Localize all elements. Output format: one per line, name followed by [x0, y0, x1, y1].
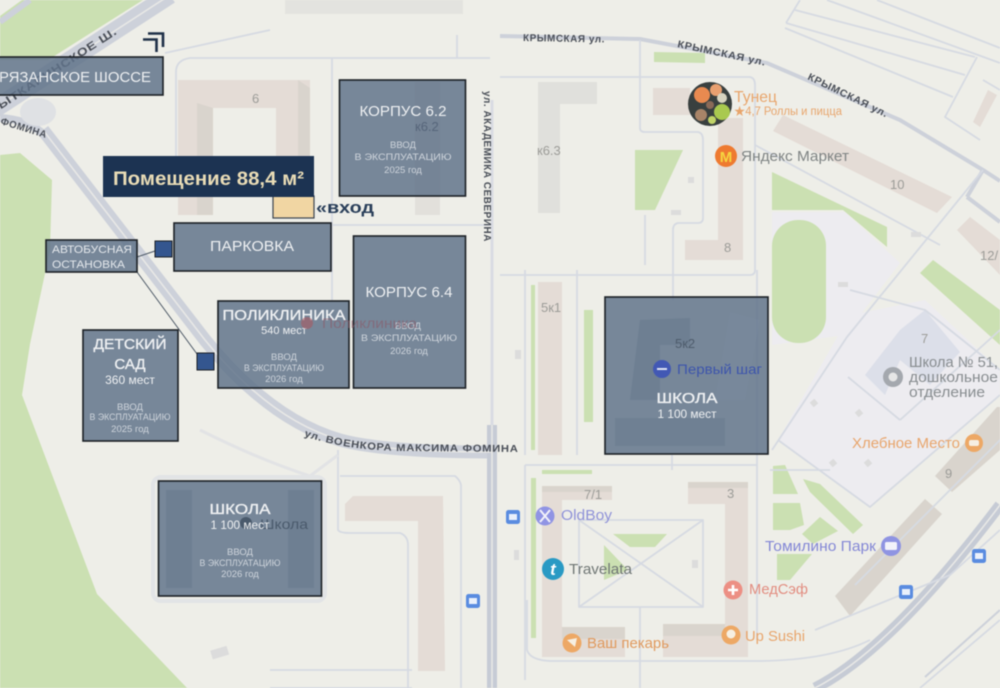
label: Yandex Market: Яндекс Маркет	[741, 148, 849, 165]
icon: Tomilino Park	[881, 536, 901, 556]
label: OldBoy: OldBoy	[561, 507, 613, 524]
label: school 51	[909, 354, 998, 401]
label: Tunets: ★4,7 Роллы и пицца	[734, 105, 843, 118]
panel: Ryazanskoe highway	[0, 57, 163, 95]
panel: Ryazanskoe highway: РЯЗАНСКОЕ ШОССЕ	[0, 69, 151, 86]
panel: school east: 1 100 мест	[658, 407, 717, 421]
label: school 51: отделение	[909, 384, 985, 401]
street label: Krymskaya 2: КРЫМСКАЯ ул.	[676, 39, 767, 69]
map label under panels: clinic: Поликлиника	[322, 315, 417, 331]
house numbers: 7/1	[584, 487, 602, 502]
street label: Voenkora Maksima Fomina: ул. ВОЕНКОРА МАКСИМА ФОМИНА	[303, 430, 518, 453]
panel: school east: 5к2	[675, 336, 695, 351]
icon: north arrow	[143, 34, 163, 52]
school grounds	[772, 212, 1000, 507]
label: Tunets	[734, 89, 843, 118]
icon: Khlebnoe Mesto	[965, 434, 983, 452]
panel: premises area: Помещение 88,4 м²	[113, 169, 304, 190]
panel: clinic: 2026 год	[265, 374, 303, 385]
panel: clinic	[218, 301, 349, 388]
parking marks	[210, 177, 921, 659]
icon: Yandex Market: М	[720, 149, 732, 166]
house numbers: 5к1	[541, 300, 561, 315]
label: Vash pekar: Ваш пекарь	[587, 635, 669, 652]
house numbers: 3	[727, 486, 734, 501]
green area: left park	[0, 153, 187, 688]
panel: school south-west: 2026 год	[221, 569, 259, 580]
house numbers: 6	[252, 91, 259, 106]
panel: school south-west: В ЭКСПЛУАТАЦИЮ	[200, 558, 281, 569]
house numbers: 10	[890, 177, 904, 192]
icon: OldBoy	[536, 506, 554, 526]
panel: building 6.4: ВВОД	[395, 321, 422, 332]
panel: kindergarten: В ЭКСПЛУАТАЦИЮ	[90, 412, 171, 423]
panel: kindergarten: ВВОД	[117, 402, 144, 413]
panel: clinic: ВВОД	[271, 352, 298, 363]
street label: Krymskaya 3: КРЫМСКАЯ ул.	[806, 72, 890, 120]
panel: building 6.4: КОРПУС 6.4	[366, 284, 452, 301]
label: school 51: дошкольное	[909, 369, 998, 386]
label: Tomilino Park: Томилино Парк	[765, 538, 876, 555]
label: Up Sushi: Up Sushi	[745, 628, 805, 645]
street label: Akademika Severina: ул. АКАДЕМИКА СЕВЕРИНА	[481, 91, 492, 242]
panel: school south-west: ВВОД	[227, 547, 254, 558]
panel: building 6.2: В ЭКСПЛУАТАЦИЮ	[354, 152, 452, 163]
label: Travelata: Travelata	[569, 561, 633, 578]
entrance label: «вход	[316, 198, 374, 217]
icon: bus stop marker 2	[197, 353, 214, 370]
street label: Krymskaya 1: КРЫМСКАЯ ул.	[523, 33, 605, 45]
house numbers: 12/	[980, 248, 998, 263]
icon: school 51	[883, 367, 903, 387]
panel: building 6.2: к6.2	[415, 119, 439, 134]
panel: parking: ПАРКОВКА	[210, 238, 294, 255]
panel: building 6.4	[354, 236, 466, 388]
panel: school east	[605, 297, 768, 454]
panel: kindergarten	[83, 330, 178, 441]
icon: Travelata	[542, 558, 564, 580]
icon: Vash pekar	[562, 634, 582, 652]
label: school 51: Школа № 51,	[909, 354, 998, 371]
orange premises	[273, 196, 314, 218]
icon: MedSef	[724, 580, 742, 600]
panel: building 6.4: 2026 год	[390, 346, 428, 357]
panel: building 6.2	[340, 80, 466, 196]
panel: school south-west	[158, 481, 322, 596]
icon: sushi restaurant	[688, 82, 732, 126]
panel: school south-west: 1 100 мест	[210, 518, 270, 532]
icon: bus stop marker 1	[155, 241, 172, 257]
green areas: east	[531, 52, 1000, 638]
panel: clinic: ПОЛИКЛИНИКА	[222, 307, 346, 324]
panel: school south-west: Школа	[260, 516, 308, 532]
panel: kindergarten: 2025 год	[111, 424, 149, 435]
street label: Fomina: ФОМИНА	[0, 116, 48, 141]
panel: premises area	[103, 156, 314, 197]
panel: building 6.2: 2025 год	[384, 165, 422, 176]
panel: building 6.2: ВВОД	[390, 140, 417, 151]
label: Khlebnoe Mesto: Хлебное Место	[852, 435, 960, 452]
panel: kindergarten: ДЕТСКИЙ	[94, 335, 166, 353]
green area: top left	[0, 0, 143, 60]
house numbers: 9	[945, 466, 952, 481]
panel: school east: Первый шаг	[677, 361, 762, 377]
bus stop icons	[466, 510, 986, 608]
panel: parking	[174, 223, 331, 271]
house numbers: к6.3	[537, 143, 561, 158]
connector lines	[137, 251, 197, 354]
panel: kindergarten: 360 мест	[105, 373, 155, 387]
label: Tunets: Тунец	[734, 89, 777, 106]
panel: building 6.2: КОРПУС 6.2	[360, 103, 446, 120]
label: MedSef: МедСэф	[749, 581, 808, 598]
panel: school south-west: ШКОЛА	[210, 501, 270, 518]
house numbers	[252, 91, 998, 502]
panel: building 6.4: В ЭКСПЛУАТАЦИЮ	[361, 333, 457, 344]
icon: Travelata: t	[550, 560, 557, 579]
panel: kindergarten: САД	[114, 356, 146, 373]
panel: clinic: 540 мест	[261, 325, 307, 337]
panel: bus stop	[46, 240, 137, 272]
panel: clinic: В ЭКСПЛУАТАЦИЮ	[244, 363, 324, 374]
house numbers: 7	[921, 331, 928, 346]
icon: Up Sushi	[722, 626, 740, 644]
panel: school east: ШКОЛА	[656, 390, 718, 407]
icon: Yandex Market	[715, 145, 737, 167]
panel: bus stop: ОСТАНОВКА	[52, 259, 126, 271]
house numbers: 8	[724, 240, 731, 255]
panel: bus stop: АВТОБУСНАЯ	[52, 244, 132, 256]
